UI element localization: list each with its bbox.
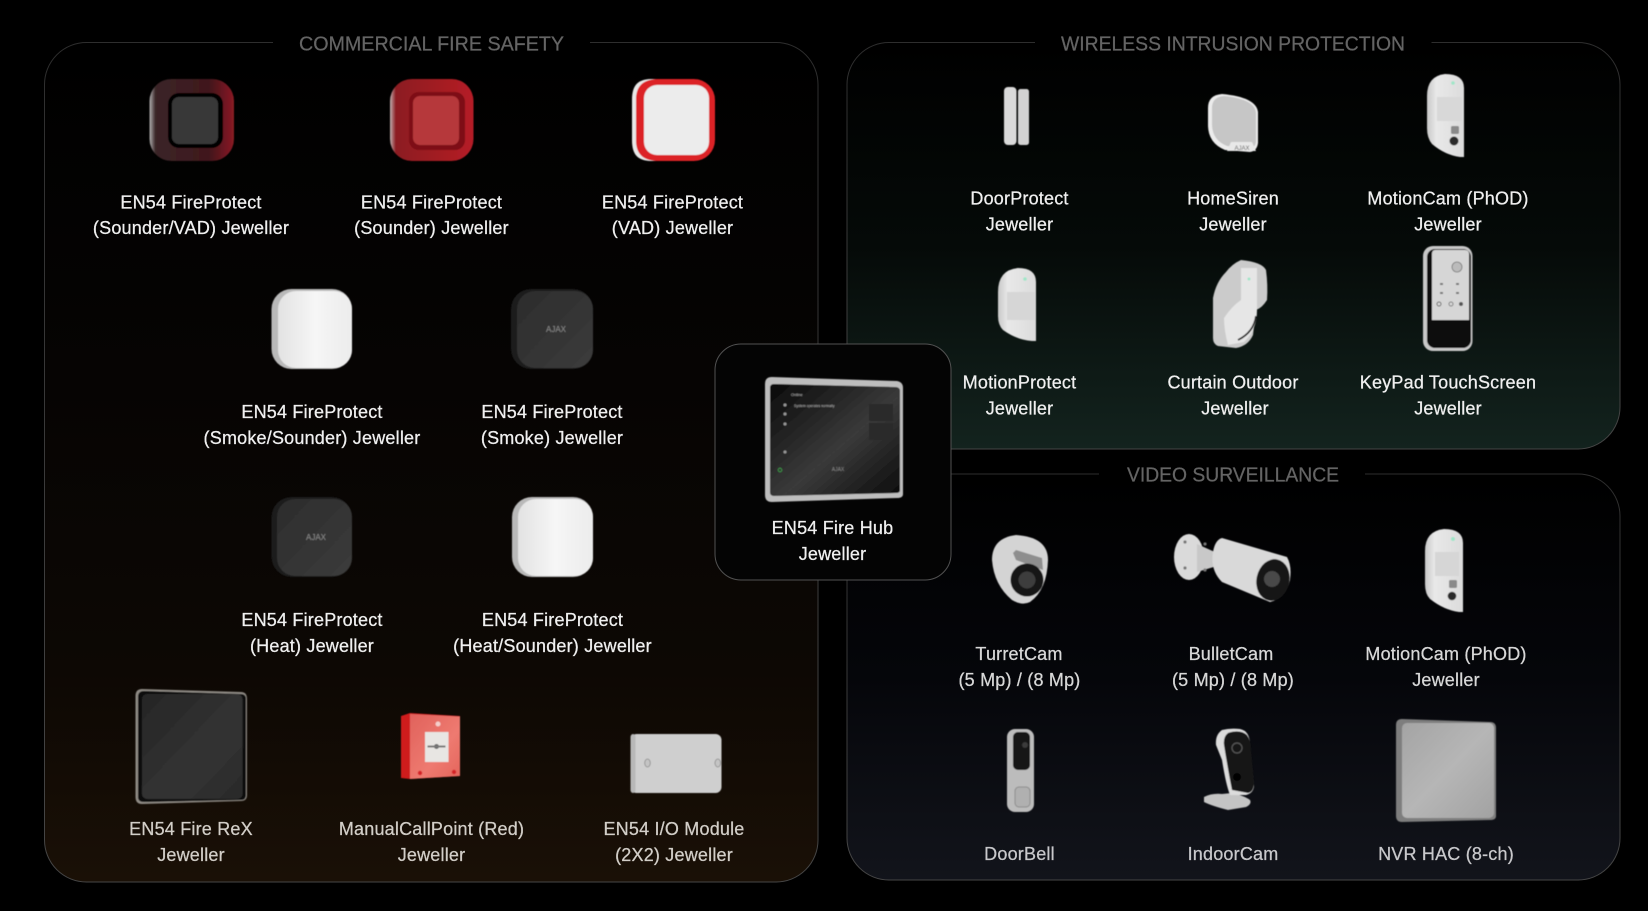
icon: motionprotect — [998, 268, 1036, 341]
label: EN54 FireProtect — [482, 610, 623, 630]
device: manual call point — [339, 713, 524, 865]
device: homesiren — [1187, 94, 1279, 234]
label: (VAD) Jeweller — [612, 218, 733, 238]
label: Jeweller — [157, 845, 225, 865]
device: fire hub: Online — [791, 392, 803, 397]
label: DoorProtect — [970, 188, 1069, 208]
label: Curtain Outdoor — [1167, 372, 1299, 392]
label: Jeweller — [1414, 214, 1482, 234]
label: KeyPad TouchScreen — [1360, 372, 1536, 392]
label: Jeweller — [1201, 398, 1269, 418]
device: bulletcam — [1172, 534, 1294, 690]
label: NVR HAC (8-ch) — [1378, 844, 1514, 864]
label: (Smoke) Jeweller — [481, 428, 623, 448]
label: (Heat/Sounder) Jeweller — [453, 636, 652, 656]
icon: manual call point — [401, 713, 460, 779]
icon: doorbell — [1007, 729, 1034, 812]
icon: homesiren: AJAX — [1234, 146, 1250, 152]
icon: turretcam — [992, 535, 1048, 604]
icon: curtain outdoor — [1213, 260, 1267, 348]
icon: smoke — [511, 289, 593, 369]
device: motioncam phod — [1365, 529, 1527, 690]
icon: motioncam phod — [1425, 529, 1463, 612]
icon: doorprotect — [1004, 87, 1029, 145]
label: HomeSiren — [1187, 188, 1279, 208]
icon: bulletcam — [1174, 534, 1294, 604]
label: EN54 Fire ReX — [129, 819, 253, 839]
label: MotionProtect — [963, 372, 1076, 392]
label: ManualCallPoint (Red) — [339, 819, 524, 839]
label: (2X2) Jeweller — [615, 845, 733, 865]
label: IndoorCam — [1188, 844, 1278, 864]
label: (5 Mp) / (8 Mp) — [958, 670, 1081, 690]
panel: EN54 fire hub — [715, 344, 951, 580]
device: motioncam — [1367, 74, 1529, 234]
heading: video surveillance: VIDEO SURVEILLANCE — [1127, 464, 1339, 486]
icon: indoorcam — [1204, 729, 1254, 810]
panel: commercial fire safety — [44, 34, 818, 882]
icon: heat — [272, 497, 352, 577]
panel: video surveillance — [847, 464, 1620, 880]
icon: keypad touchscreen — [1423, 246, 1472, 351]
label: (Sounder) Jeweller — [354, 218, 509, 238]
label: Jeweller — [799, 544, 866, 564]
device: nvr — [1378, 719, 1514, 864]
label: EN54 FireProtect — [241, 610, 383, 630]
label: DoorBell — [984, 844, 1055, 864]
device: smoke sounder — [204, 289, 420, 448]
device: keypad touchscreen — [1360, 246, 1536, 418]
label: (Sounder/VAD) Jeweller — [93, 218, 289, 238]
label: BulletCam — [1189, 644, 1273, 664]
label: EN54 I/O Module — [603, 819, 745, 839]
label: TurretCam — [975, 644, 1063, 664]
label: (5 Mp) / (8 Mp) — [1172, 670, 1294, 690]
icon: smoke sounder — [272, 289, 352, 369]
label: Jeweller — [1414, 398, 1482, 418]
device: fire hub — [765, 377, 903, 502]
device: fire hub: AJAX — [832, 467, 845, 473]
icon: smoke: AJAX — [546, 325, 567, 334]
label: Jeweller — [1199, 214, 1267, 234]
device: sounder — [354, 79, 509, 238]
label: (Heat) Jeweller — [250, 636, 374, 656]
device: smoke — [481, 289, 623, 448]
label: MotionCam (PhOD) — [1365, 644, 1527, 664]
icon: heat sounder — [512, 497, 593, 577]
device: IO module — [603, 734, 745, 865]
label: EN54 FireProtect — [361, 192, 502, 212]
device: fire hub: System operates normally — [794, 404, 835, 408]
icon: sounder VAD — [150, 79, 234, 161]
icon: heat: AJAX — [306, 533, 327, 542]
device: doorprotect — [970, 87, 1069, 234]
label: Jeweller — [986, 398, 1053, 418]
device: doorbell — [984, 729, 1055, 864]
heading: wireless intrusion protection: WIRELESS INTRUSION PROTECTION — [1061, 34, 1405, 56]
icon: motioncam — [1427, 74, 1464, 157]
panel: wireless intrusion protection — [847, 34, 1620, 449]
icon: VAD — [632, 79, 715, 161]
device: motionprotect — [963, 268, 1076, 418]
label: Jeweller — [398, 845, 465, 865]
device: curtain outdoor — [1167, 260, 1299, 418]
label: MotionCam (PhOD) — [1367, 188, 1529, 208]
device: heat — [241, 497, 383, 656]
icon: IO module — [630, 734, 722, 793]
label: Jeweller — [1412, 670, 1480, 690]
icon: fire rex — [136, 689, 247, 804]
icon: homesiren — [1208, 94, 1258, 152]
device: fire rex — [129, 689, 253, 865]
icon: sounder — [390, 79, 474, 161]
device: heat sounder — [453, 497, 652, 656]
label: EN54 FireProtect — [241, 402, 383, 422]
label: EN54 FireProtect — [120, 192, 262, 212]
device: VAD — [602, 79, 743, 238]
label: Jeweller — [986, 214, 1053, 234]
device: sounder VAD — [93, 79, 289, 238]
label: EN54 FireProtect — [481, 402, 623, 422]
device: indoorcam — [1188, 729, 1278, 864]
heading: commercial fire safety: COMMERCIAL FIRE SAFETY — [299, 34, 564, 56]
label: EN54 FireProtect — [602, 192, 743, 212]
icon: nvr — [1396, 719, 1496, 822]
label: EN54 Fire Hub — [772, 518, 893, 538]
device: turretcam — [958, 535, 1081, 690]
label: (Smoke/Sounder) Jeweller — [204, 428, 420, 448]
